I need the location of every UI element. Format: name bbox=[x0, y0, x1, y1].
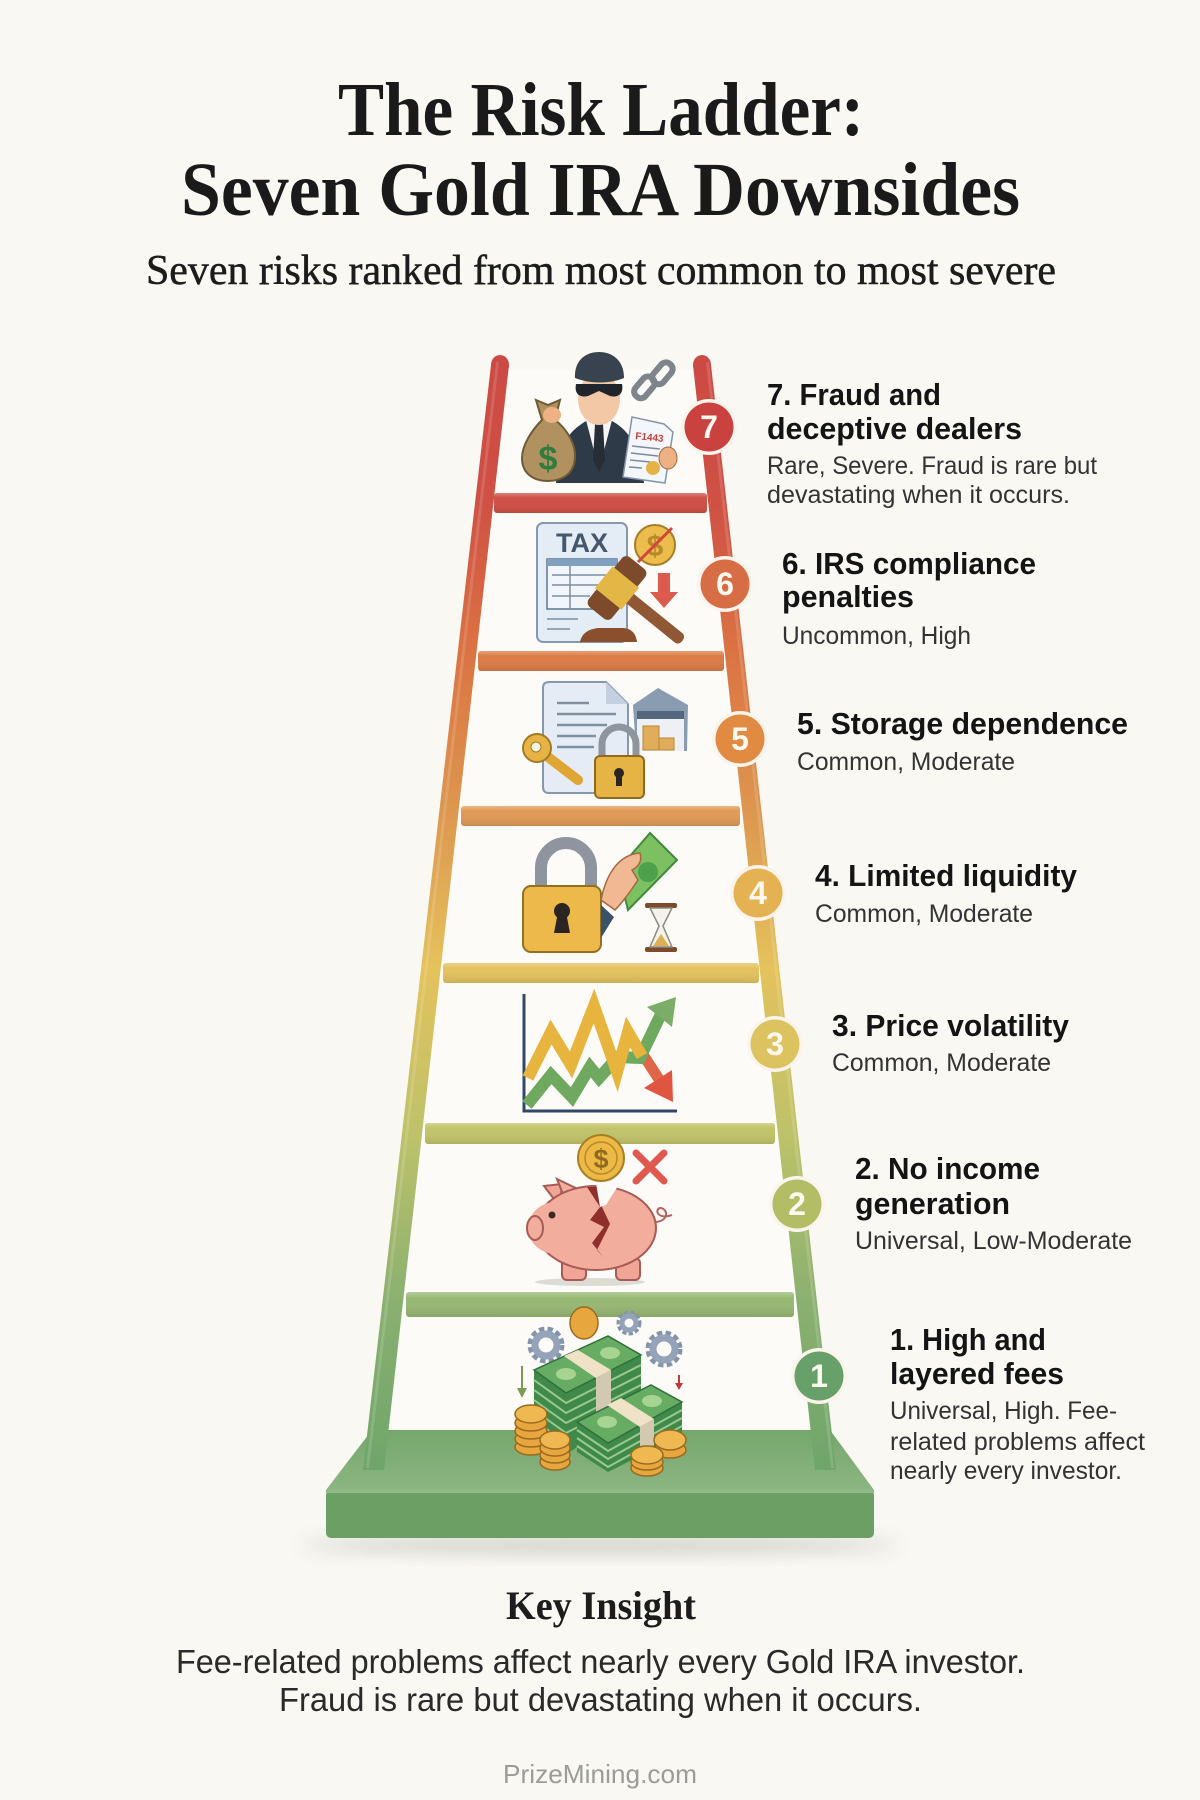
icon: cracked piggy bank: $ bbox=[593, 1144, 609, 1174]
sleeve bbox=[601, 905, 614, 938]
label: risk 3: Common, Moderate bbox=[832, 1049, 1051, 1077]
platform bbox=[326, 1430, 874, 1538]
subtitle: Seven risks ranked from most common to most severe bbox=[146, 248, 1056, 294]
coin stacks bbox=[515, 1405, 686, 1476]
icon: volatility chart bbox=[524, 994, 677, 1111]
gears bbox=[531, 1313, 679, 1364]
label: risk 5: Common, Moderate bbox=[797, 748, 1015, 776]
legs bbox=[562, 1258, 586, 1280]
left rail bbox=[363, 355, 509, 1470]
tail bbox=[654, 1208, 672, 1222]
label: risk 1: 1. High and bbox=[890, 1322, 1046, 1357]
badge 5: 5 bbox=[731, 721, 749, 757]
title: The Risk Ladder: bbox=[338, 68, 864, 152]
rungs bbox=[406, 493, 794, 1317]
icon: thief with money bag and fake document: $ bbox=[539, 440, 558, 478]
label: risk 4 bbox=[815, 858, 1078, 928]
red arrow bbox=[640, 1050, 664, 1087]
yellow line bbox=[528, 1006, 642, 1078]
crossed out coin bbox=[635, 525, 675, 565]
badge 2: 2 bbox=[788, 1186, 806, 1222]
icon: thief with money bag and fake document bbox=[522, 352, 677, 483]
label: risk 6: Uncommon, High bbox=[782, 622, 971, 650]
label: risk 2: Universal, Low-Moderate bbox=[855, 1227, 1132, 1255]
label: risk 1: Universal, High. Fee- bbox=[890, 1397, 1117, 1425]
warehouse bbox=[633, 688, 688, 751]
key insight heading: Key Insight bbox=[506, 1583, 697, 1628]
down arrow bbox=[650, 573, 678, 608]
icon: tax form and gavel bbox=[537, 523, 702, 666]
icon: document key lock warehouse bbox=[523, 682, 688, 798]
badge 1 bbox=[791, 1348, 847, 1404]
padlock bbox=[602, 727, 636, 758]
label: risk 7: devastating when it occurs. bbox=[767, 481, 1070, 509]
chain bbox=[632, 360, 675, 401]
coin bbox=[578, 1135, 624, 1181]
label: risk 3 bbox=[832, 1008, 1070, 1077]
label: risk 7: Rare, Severe. Fraud is rare but bbox=[767, 452, 1097, 480]
icon: tax form and gavel: TAX bbox=[556, 528, 608, 558]
label: risk 4: Common, Moderate bbox=[815, 900, 1033, 928]
key insight text bbox=[176, 1643, 1025, 1718]
badge 4 bbox=[730, 865, 786, 921]
hat bbox=[575, 352, 624, 382]
icon: tax form and gavel: $ bbox=[647, 530, 664, 563]
ears bbox=[544, 1184, 562, 1207]
key insight text: Fee-related problems affect nearly every Gold IRA investor. bbox=[176, 1643, 1025, 1680]
label: risk 4: 4. Limited liquidity bbox=[815, 858, 1078, 893]
label: risk 6: penalties bbox=[782, 579, 914, 614]
money bag bbox=[522, 400, 575, 481]
icon: money stacks coins gears bbox=[515, 1307, 686, 1476]
label: risk 2 bbox=[855, 1151, 1132, 1255]
arrows bbox=[521, 1366, 523, 1390]
badge 7: 7 bbox=[700, 409, 718, 445]
label: risk 2: 2. No income bbox=[855, 1151, 1040, 1186]
right rail bbox=[693, 355, 836, 1470]
label: risk 7: deceptive dealers bbox=[767, 411, 1022, 446]
floating coin bbox=[570, 1307, 598, 1339]
title: Seven Gold IRA Downsides bbox=[181, 148, 1020, 232]
gavel bbox=[584, 552, 702, 666]
label: risk 6: 6. IRS compliance bbox=[782, 546, 1036, 581]
badge 2 bbox=[769, 1176, 825, 1232]
label: risk 3: 3. Price volatility bbox=[832, 1008, 1070, 1043]
label: risk 6 bbox=[782, 546, 1036, 650]
icon: thief with money bag and fake document: F1443 bbox=[635, 431, 664, 445]
badge 4: 4 bbox=[749, 875, 767, 911]
stack back bbox=[534, 1355, 641, 1455]
hourglass bbox=[645, 903, 677, 908]
key insight text: Fraud is rare but devastating when it occurs. bbox=[279, 1681, 922, 1718]
badge 7 bbox=[681, 399, 737, 455]
green line bbox=[527, 1012, 662, 1105]
gavel base bbox=[580, 628, 637, 642]
hand bbox=[601, 853, 641, 910]
badge 3 bbox=[747, 1016, 803, 1072]
label: risk 1: layered fees bbox=[890, 1356, 1064, 1391]
badge 1: 1 bbox=[810, 1358, 828, 1394]
icon: padlock hand cash hourglass bbox=[523, 833, 677, 952]
stack front bbox=[577, 1402, 682, 1472]
red x bbox=[636, 1153, 664, 1181]
badge 5 bbox=[712, 711, 768, 767]
label: risk 1: related problems affect bbox=[890, 1428, 1145, 1456]
label: risk 1 bbox=[890, 1322, 1145, 1485]
label: risk 7 bbox=[767, 377, 1097, 509]
document bbox=[623, 417, 673, 483]
label: risk 5 bbox=[797, 706, 1128, 776]
badge 6 bbox=[697, 556, 753, 612]
title bbox=[181, 68, 1020, 232]
crack bbox=[587, 1187, 612, 1258]
icon: cracked piggy bank bbox=[527, 1135, 672, 1286]
suit bbox=[556, 420, 644, 483]
mask bbox=[576, 384, 622, 396]
key bbox=[548, 757, 578, 780]
badge 3: 3 bbox=[766, 1026, 784, 1062]
label: risk 1: nearly every investor. bbox=[890, 1457, 1122, 1485]
source credit: PrizeMining.com bbox=[503, 1759, 697, 1789]
label: risk 7: 7. Fraud and bbox=[767, 377, 941, 412]
badges bbox=[681, 399, 847, 1404]
cash bbox=[618, 833, 677, 910]
label: risk 5: 5. Storage dependence bbox=[797, 706, 1128, 741]
label: risk 2: generation bbox=[855, 1186, 1010, 1221]
body bbox=[536, 1186, 656, 1270]
badge 6: 6 bbox=[716, 566, 734, 602]
ladder bbox=[300, 355, 900, 1552]
